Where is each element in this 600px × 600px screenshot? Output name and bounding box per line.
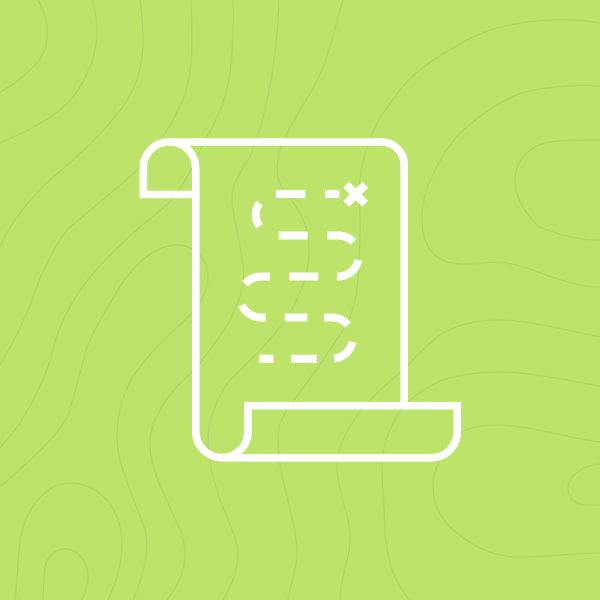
icon: parchment scroll (143, 142, 457, 458)
scroll page body (169, 142, 404, 458)
dashed treasure route (242, 194, 358, 359)
icon: X marks the spot (346, 185, 365, 204)
scroll top curl (143, 142, 197, 194)
scroll bottom foot (222, 406, 457, 458)
